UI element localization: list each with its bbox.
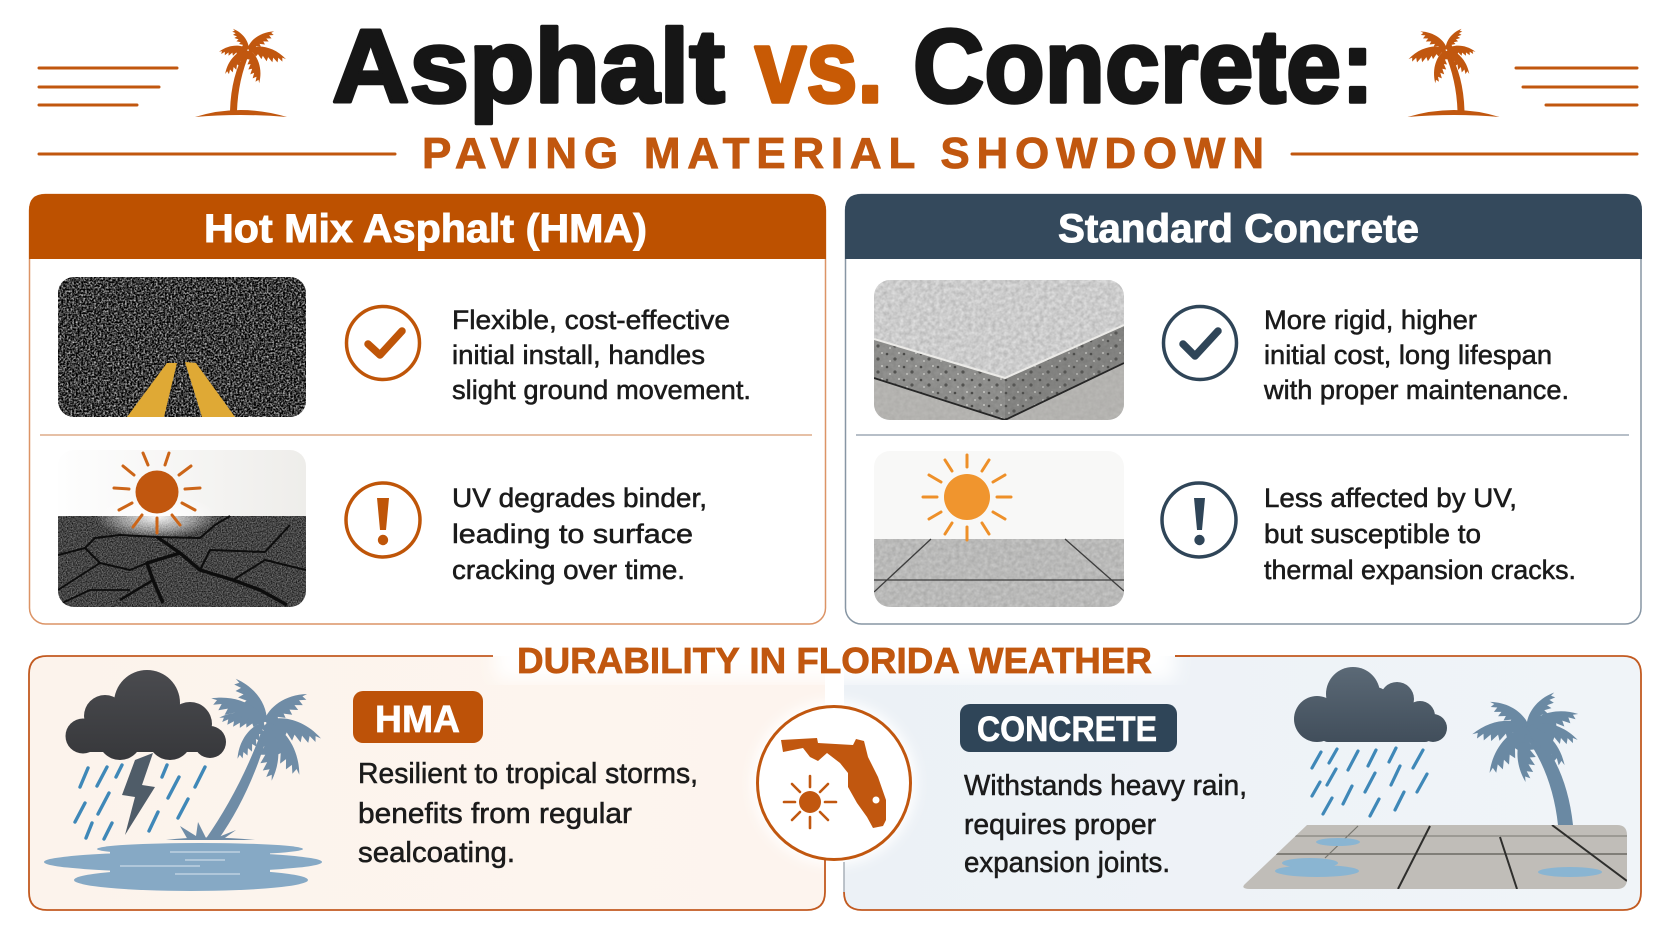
illustration: jointed pavement with puddles: [1240, 825, 1630, 891]
badge: HMA: [353, 691, 483, 743]
text: resilient: benefits from regular: [358, 798, 632, 830]
right speed lines: [1292, 68, 1637, 154]
text: more rigid: with proper maintenance.: [1263, 375, 1569, 405]
text: flexible: slight ground movement.: [452, 375, 751, 405]
icon: sun: [784, 776, 836, 828]
icon: warning: [346, 483, 420, 557]
icon: palm tree left: [195, 26, 287, 117]
text: withstands: Withstands heavy rain,: [964, 770, 1247, 802]
icon: thunderstorm cloud: [66, 670, 226, 835]
header: [39, 9, 1637, 178]
icon: rain: [75, 765, 205, 839]
icon: palm tree bending: [166, 673, 324, 840]
icon: rain cloud: [1294, 667, 1447, 742]
text: withstands: expansion joints.: [964, 847, 1170, 879]
heading: HMA: [29, 194, 826, 259]
panel: durability in Florida weather: [29, 630, 1641, 912]
image: concrete slab: [874, 280, 1124, 420]
title: Asphalt: [332, 9, 725, 125]
heading: concrete: Standard Concrete: [1058, 207, 1419, 251]
icon: palm tree: [1472, 688, 1581, 825]
text: less affected: [1264, 483, 1576, 585]
icon: flood puddle: [44, 843, 322, 891]
title: vs.: [755, 9, 883, 125]
text: UV degrades: cracking over time.: [452, 555, 685, 585]
text: resilient: [358, 758, 698, 869]
icon: Florida badge: [758, 706, 910, 860]
heading: durability: DURABILITY IN FLORIDA WEATHER: [517, 640, 1152, 681]
heading: HMA: Hot Mix Asphalt (HMA): [204, 207, 647, 251]
badge: HMA: HMA: [375, 699, 460, 741]
text: UV degrades: [452, 483, 707, 585]
image: asphalt road: [58, 277, 306, 417]
text: more rigid: initial cost, long lifespan: [1264, 340, 1552, 370]
icon: check: [1164, 306, 1236, 380]
text: UV degrades: UV degrades binder,: [452, 483, 707, 513]
text: more rigid: More rigid, higher: [1264, 305, 1477, 335]
badge: concrete: CONCRETE: [977, 710, 1157, 749]
image: sun on cracked asphalt: [58, 450, 306, 607]
image: sun on concrete: [874, 451, 1124, 607]
text: withstands: [964, 770, 1247, 879]
text: UV degrades: leading to surface: [452, 519, 693, 549]
text: less affected: thermal expansion cracks.: [1264, 555, 1576, 585]
title: [332, 9, 1374, 125]
icon: palm tree right: [1407, 26, 1500, 117]
text: less affected: Less affected by UV,: [1264, 483, 1517, 513]
icon: warning: [1162, 483, 1236, 557]
panel: HMA durability: [29, 630, 1641, 912]
panel: standard concrete: [845, 194, 1642, 624]
title: Concrete:: [913, 9, 1374, 125]
text: flexible: [452, 305, 751, 405]
icon: check: [346, 306, 420, 380]
text: resilient: Resilient to tropical storms,: [358, 758, 698, 790]
text: flexible: initial install, handles: [452, 340, 705, 370]
panel: concrete durability: [844, 656, 1641, 910]
text: withstands: requires proper: [964, 809, 1156, 841]
text: flexible: Flexible, cost-effective: [452, 305, 730, 335]
left speed lines: [39, 68, 395, 154]
text: resilient: sealcoating.: [358, 837, 515, 869]
icon: Florida map: [781, 738, 886, 828]
heading: concrete: [845, 194, 1642, 259]
subtitle: PAVING MATERIAL SHOWDOWN: [422, 129, 1264, 178]
panel: hot mix asphalt: [29, 194, 826, 624]
text: more rigid: [1263, 305, 1569, 405]
icon: rain: [1312, 748, 1427, 816]
text: less affected: but susceptible to: [1264, 519, 1481, 549]
